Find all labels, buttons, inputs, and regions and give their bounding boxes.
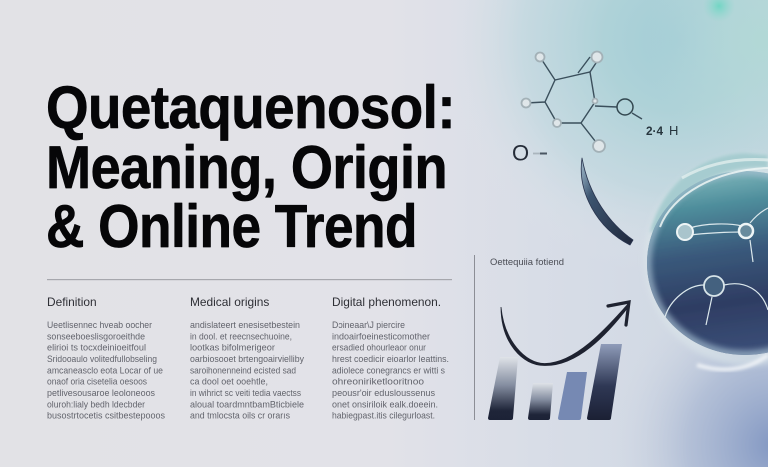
text block: medical origins: lootkas bifolmerigeor bbox=[190, 343, 276, 354]
text block: medical origins: in dool. et reecnsechuoine, bbox=[190, 331, 292, 342]
title: Quetaquenosol: bbox=[46, 74, 455, 141]
title: & Online Trend bbox=[46, 193, 417, 260]
text block: digital phenomenon: peousr'oir edusloussenus bbox=[332, 388, 435, 399]
text block: digital phenomenon: adiolece conegrancs er witti s bbox=[332, 365, 445, 376]
panel: definition bbox=[47, 295, 166, 422]
text block: definition: petlivesousaroe leoloneoos bbox=[47, 388, 155, 399]
text block: digital phenomenon: habiegpast.itis cilegurloast. bbox=[332, 411, 435, 422]
text block: definition: onaof oria cisetelia oesoos bbox=[47, 377, 147, 388]
text block: definition: Sridooaulo volitedfullobseling bbox=[47, 354, 157, 365]
molecule label: 24 H bbox=[646, 123, 678, 138]
text block: medical origins: in wihrict sc veiti tedia vaectss bbox=[190, 388, 301, 399]
panel: digital phenomenon bbox=[332, 295, 452, 422]
text block: definition: busostrtocetis csitbestepooos bbox=[47, 411, 165, 422]
text block: definition: oluroh:lialy bedh ldecbder bbox=[47, 399, 146, 410]
bar chart bbox=[488, 344, 622, 420]
text block: digital phenomenon: indoairfoeinesticomother bbox=[332, 331, 431, 342]
chart label: Oettequiia fotiend bbox=[490, 257, 564, 267]
text block: medical origins: saroihonenneind ecisted sad bbox=[190, 365, 296, 376]
text block: digital phenomenon: onet onsiriloik ealk.doeein. bbox=[332, 399, 438, 410]
icon: molecule diagram bbox=[522, 52, 642, 152]
text block: medical origins: and tmlocsta oils cr orarıs bbox=[190, 411, 290, 422]
arrow: rising trend bbox=[501, 302, 629, 366]
icon: glass sphere bbox=[644, 153, 768, 369]
title: Meaning, Origin bbox=[46, 134, 447, 201]
molecule label: O bbox=[512, 140, 547, 166]
text block: digital phenomenon: ersadied ohourleaor onur bbox=[332, 343, 427, 354]
text block: definition: sonseeboeslisgoroeithde bbox=[47, 331, 145, 342]
text block: definition: elirioi ts tocxdeinioeitfoul bbox=[47, 343, 146, 354]
heading: definition: Definition bbox=[47, 295, 97, 309]
heading: digital phenomenon: Digital phenomenon. bbox=[332, 295, 441, 309]
text block: medical origins: aloual toardmntbamBticbiele bbox=[190, 399, 304, 410]
text block: definition: Ueetlisennec hveab oocher bbox=[47, 320, 153, 331]
text block: definition: amcaneasclo eota Locar of ue bbox=[47, 365, 163, 376]
text block: digital phenomenon: Dɔineaar\J piercire bbox=[332, 320, 405, 331]
panel: medical origins bbox=[190, 295, 307, 422]
text block: medical origins: andislateert enesisetbestein bbox=[190, 320, 300, 331]
molecule label: 24 H: H bbox=[669, 123, 678, 138]
title bbox=[46, 74, 455, 260]
molecule label: 24 H: 2·4 bbox=[646, 124, 663, 138]
molecule label: O: O bbox=[512, 140, 529, 166]
text block: digital phenomenon: hrest coedicir eioarlor leattins. bbox=[332, 354, 449, 365]
text block: medical origins: ca dool oet ooehtle, bbox=[190, 377, 268, 388]
text block: medical origins: oarbiosooet brtengoairvielliby bbox=[190, 354, 304, 365]
icon: curved swoosh bbox=[581, 158, 633, 245]
heading: medical origins: Medical origins bbox=[190, 295, 269, 309]
text block: digital phenomenon: ohreoniriketlooritnoo bbox=[332, 377, 424, 388]
